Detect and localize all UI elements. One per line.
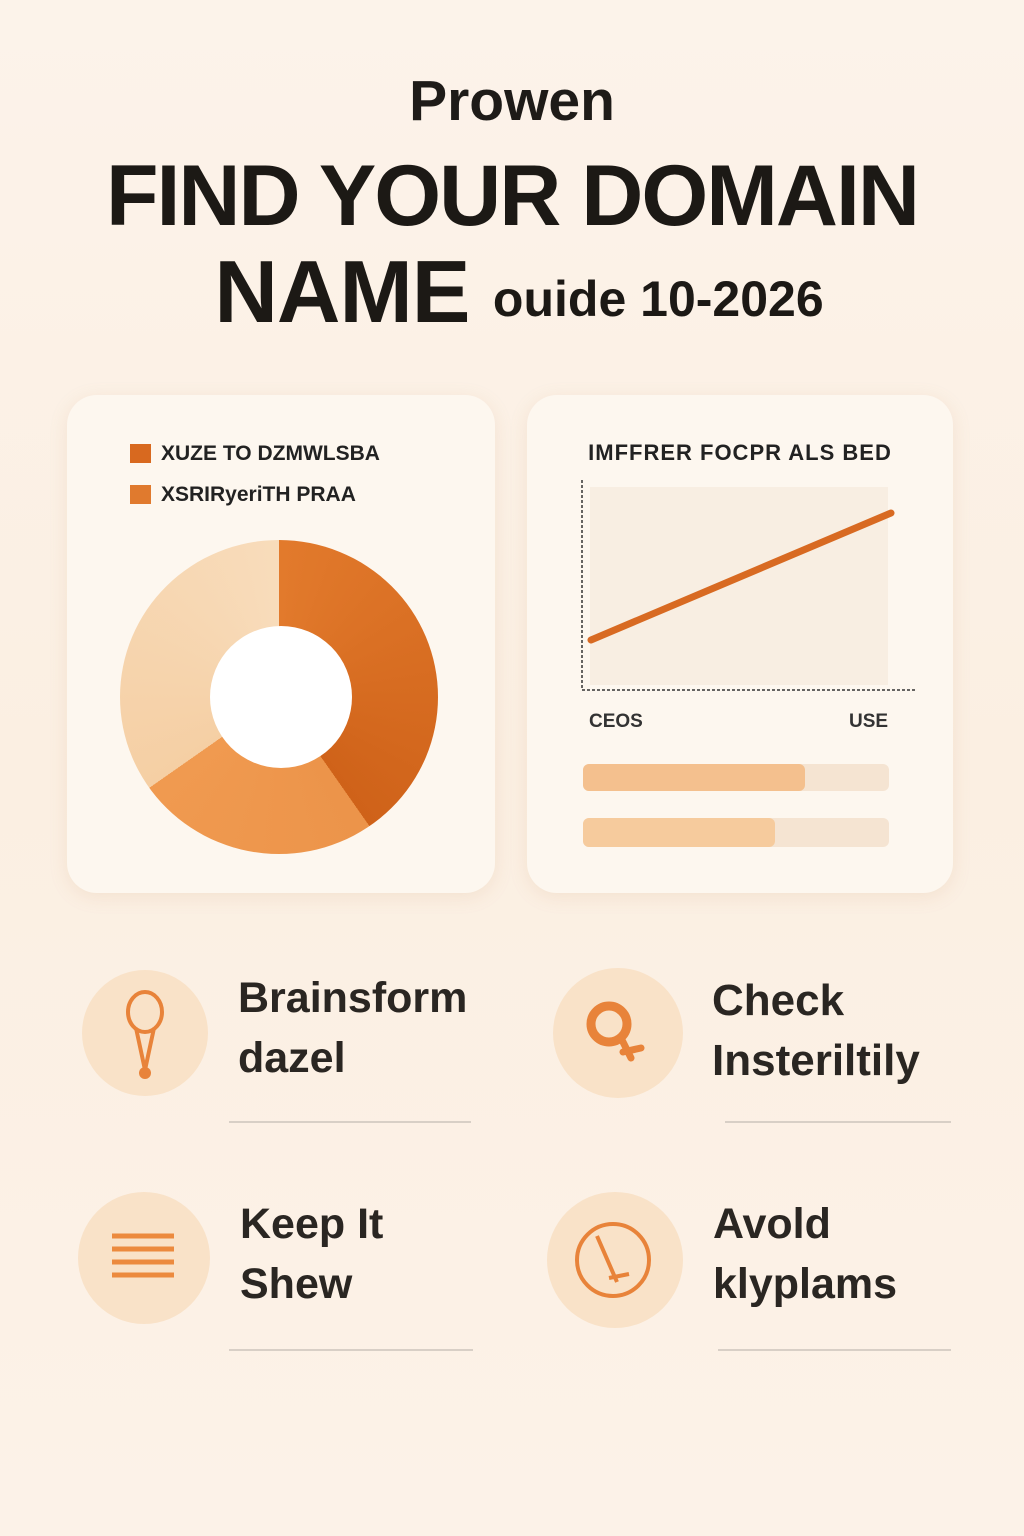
item: brainstorm: Brainsform: [238, 974, 467, 1022]
legend: XUZE TO DZMWLSBA: [161, 442, 380, 465]
line chart: [581, 480, 915, 732]
item: check: Check: [712, 976, 844, 1025]
title: FIND YOUR DOMAIN: [106, 148, 918, 244]
item: keep it short: Keep It: [240, 1200, 383, 1248]
legend: [130, 442, 380, 506]
line chart: USE: [849, 711, 888, 732]
title: [106, 148, 918, 341]
icon: lines: [78, 1192, 210, 1324]
icon: prohibited: [547, 1192, 683, 1328]
item: brainstorm: dazel: [238, 1034, 346, 1082]
item: keep it short: [78, 1192, 473, 1351]
item: avoid: [547, 1192, 951, 1351]
item: check: [553, 968, 951, 1123]
icon: search: [553, 968, 683, 1098]
item: brainstorm: [82, 970, 471, 1123]
title: NAME ouide 10-2026: [214, 242, 824, 341]
chart title: IMFFRER FOCPR ALS BED: [588, 440, 892, 465]
line chart: CEOS: [589, 711, 643, 732]
item: avoid: Avold: [713, 1200, 831, 1248]
panel: line chart: [527, 395, 953, 893]
item: keep it short: Shew: [240, 1260, 352, 1308]
donut chart: [120, 540, 438, 854]
legend: XSRIRyeriTH PRAA: [161, 483, 356, 506]
icon: bulb: [82, 970, 208, 1096]
subtitle: Prowen: Prowen: [409, 69, 615, 133]
item: check: Insteriltily: [712, 1036, 920, 1085]
panel: donut chart: [67, 395, 495, 893]
item: avoid: klyplams: [713, 1260, 897, 1308]
progress bars: [583, 764, 889, 791]
